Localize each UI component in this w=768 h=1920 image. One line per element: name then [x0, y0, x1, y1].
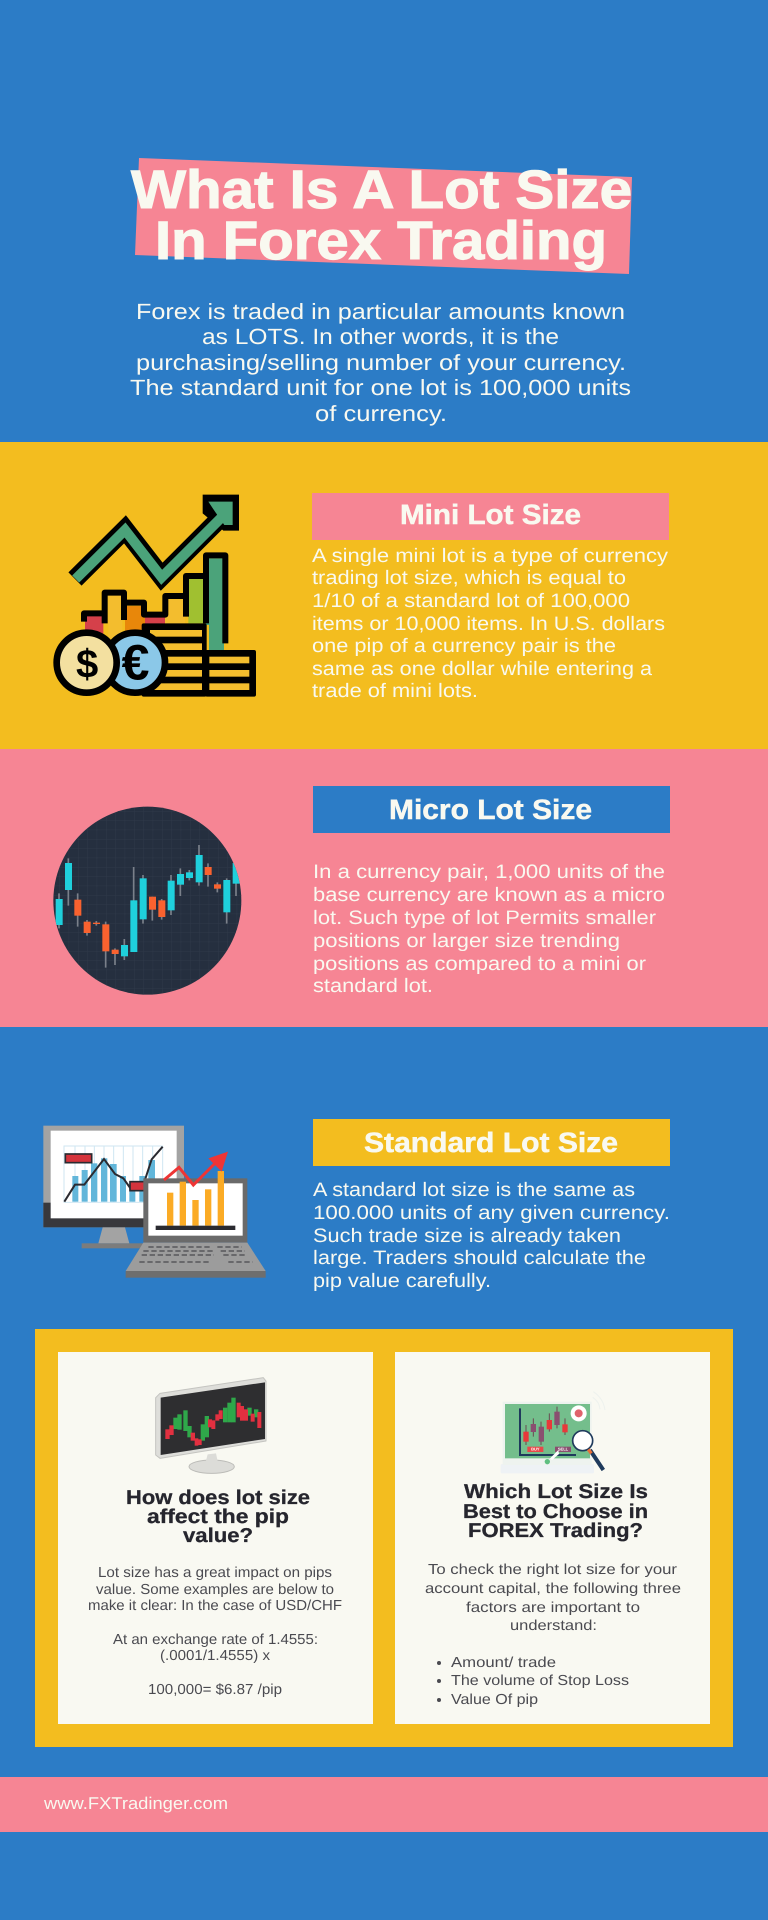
footer band: www.FXTradinger.com — [43, 1794, 228, 1813]
heading: mini lot size: Mini Lot Size — [400, 499, 581, 530]
title banner: In Forex Trading — [155, 211, 607, 271]
text: mini lot description: items or 10,000 items. In U.S. dollars — [312, 613, 665, 635]
text: micro lot description: lot. Such type of lot Permits smaller — [313, 907, 657, 929]
text: pip value explanation: 100,000= $6.87 /pip — [148, 1682, 282, 1698]
text: pip value explanation: make it clear: In the case of USD/CHF — [88, 1598, 342, 1614]
footer band — [0, 1777, 768, 1832]
icon: candlestick chart circle — [50, 805, 243, 998]
text: micro lot description: positions or larger size trending — [313, 930, 620, 952]
text: mini lot description: 1/10 of a standard lot of 100,000 — [312, 590, 630, 612]
text: micro lot description: In a currency pair, 1,000 units of the — [313, 861, 665, 883]
text: mini lot description — [312, 545, 668, 702]
heading: which lot size is best — [463, 1481, 648, 1542]
icon: growth chart with coins — [57, 495, 256, 697]
title banner — [131, 158, 632, 274]
text: mini lot description: A single mini lot is a type of currency — [312, 545, 668, 567]
heading: which lot size is best: Which Lot Size Is — [464, 1481, 648, 1503]
heading: how does lot size affect the pip value — [126, 1487, 310, 1547]
panel: standard lot size — [43, 1119, 670, 1292]
list: three factors — [437, 1655, 629, 1708]
heading: which lot size is best: Best to Choose in — [463, 1501, 648, 1523]
icon: growth chart with coins: € — [122, 634, 149, 690]
icon: laptop chart with magnifier: SELL — [558, 1447, 568, 1452]
text: lot size explanation: To check the right lot size for your — [428, 1562, 677, 1578]
intro paragraph: purchasing/selling number of your currency. — [136, 350, 626, 375]
heading: how does lot size affect the pip value: value? — [183, 1525, 253, 1547]
text: mini lot description: trading lot size, which is equal to — [312, 567, 626, 589]
text: lot size explanation: understand: — [510, 1618, 597, 1634]
text: micro lot description: standard lot. — [313, 975, 433, 997]
icon: laptop chart with magnifier: BUY — [531, 1447, 540, 1452]
text: standard lot description: large. Traders should calculate the — [313, 1247, 646, 1269]
text: pip value explanation: At an exchange rate of 1.4555: — [113, 1632, 318, 1648]
text: pip value explanation: Lot size has a great impact on pips — [98, 1565, 332, 1581]
heading: how does lot size affect the pip value: How does lot size — [126, 1487, 310, 1509]
text: mini lot description: same as one dollar while entering a — [312, 658, 652, 680]
icon: trading monitor — [156, 1378, 266, 1473]
title banner: What Is A Lot Size — [131, 160, 632, 220]
heading: standard lot size: Standard Lot Size — [364, 1127, 618, 1158]
text: lot size explanation: factors are important to — [466, 1600, 640, 1616]
intro paragraph: of currency. — [315, 401, 447, 426]
icon: laptop chart with magnifier — [501, 1392, 605, 1473]
heading: mini lot size — [312, 493, 669, 540]
text: lot size explanation — [425, 1562, 681, 1634]
panel: micro lot size — [0, 749, 768, 1027]
text: mini lot description: trade of mini lots. — [312, 680, 478, 702]
list: three factors: Value Of pip — [451, 1692, 538, 1708]
heading: micro lot size: Micro Lot Size — [389, 794, 592, 825]
card: pip value — [58, 1352, 373, 1724]
text: pip value explanation: value. Some examples are below to — [96, 1582, 334, 1598]
panel: yellow card container — [35, 1329, 733, 1747]
text: standard lot description: A standard lot size is the same as — [313, 1179, 635, 1201]
text: standard lot description: Such trade size is already taken — [313, 1225, 621, 1247]
text: mini lot description: one pip of a currency pair is the — [312, 635, 616, 657]
text: pip value explanation — [88, 1565, 342, 1698]
intro paragraph: as LOTS. In other words, it is the — [202, 324, 559, 349]
text: lot size explanation: account capital, the following three — [425, 1581, 681, 1597]
text: micro lot description: positions as compared to a mini or — [313, 953, 647, 975]
list: three factors: The volume of Stop Loss — [451, 1673, 629, 1689]
list: three factors: Amount/ trade — [451, 1655, 556, 1671]
panel: mini lot size — [0, 442, 768, 749]
header section — [130, 158, 632, 426]
heading: micro lot size — [313, 786, 670, 833]
card: which lot size — [395, 1352, 710, 1724]
heading: which lot size is best: FOREX Trading? — [468, 1520, 643, 1542]
heading: how does lot size affect the pip value: affect the pip — [147, 1506, 289, 1528]
text: standard lot description — [313, 1179, 670, 1292]
icon: monitor and laptop charts — [43, 1126, 266, 1278]
text: standard lot description: 100.000 units of any given currency. — [313, 1202, 670, 1224]
text: micro lot description — [313, 861, 665, 997]
intro paragraph — [130, 299, 631, 426]
text: micro lot description: base currency are known as a micro — [313, 884, 665, 906]
intro paragraph: The standard unit for one lot is 100,000 units — [130, 375, 631, 400]
heading: standard lot size — [313, 1119, 670, 1166]
icon: growth chart with coins: $ — [76, 641, 98, 686]
intro paragraph: Forex is traded in particular amounts known — [136, 299, 625, 324]
text: pip value explanation: (.0001/1.4555) x — [160, 1648, 271, 1664]
text: standard lot description: pip value carefully. — [313, 1270, 491, 1292]
